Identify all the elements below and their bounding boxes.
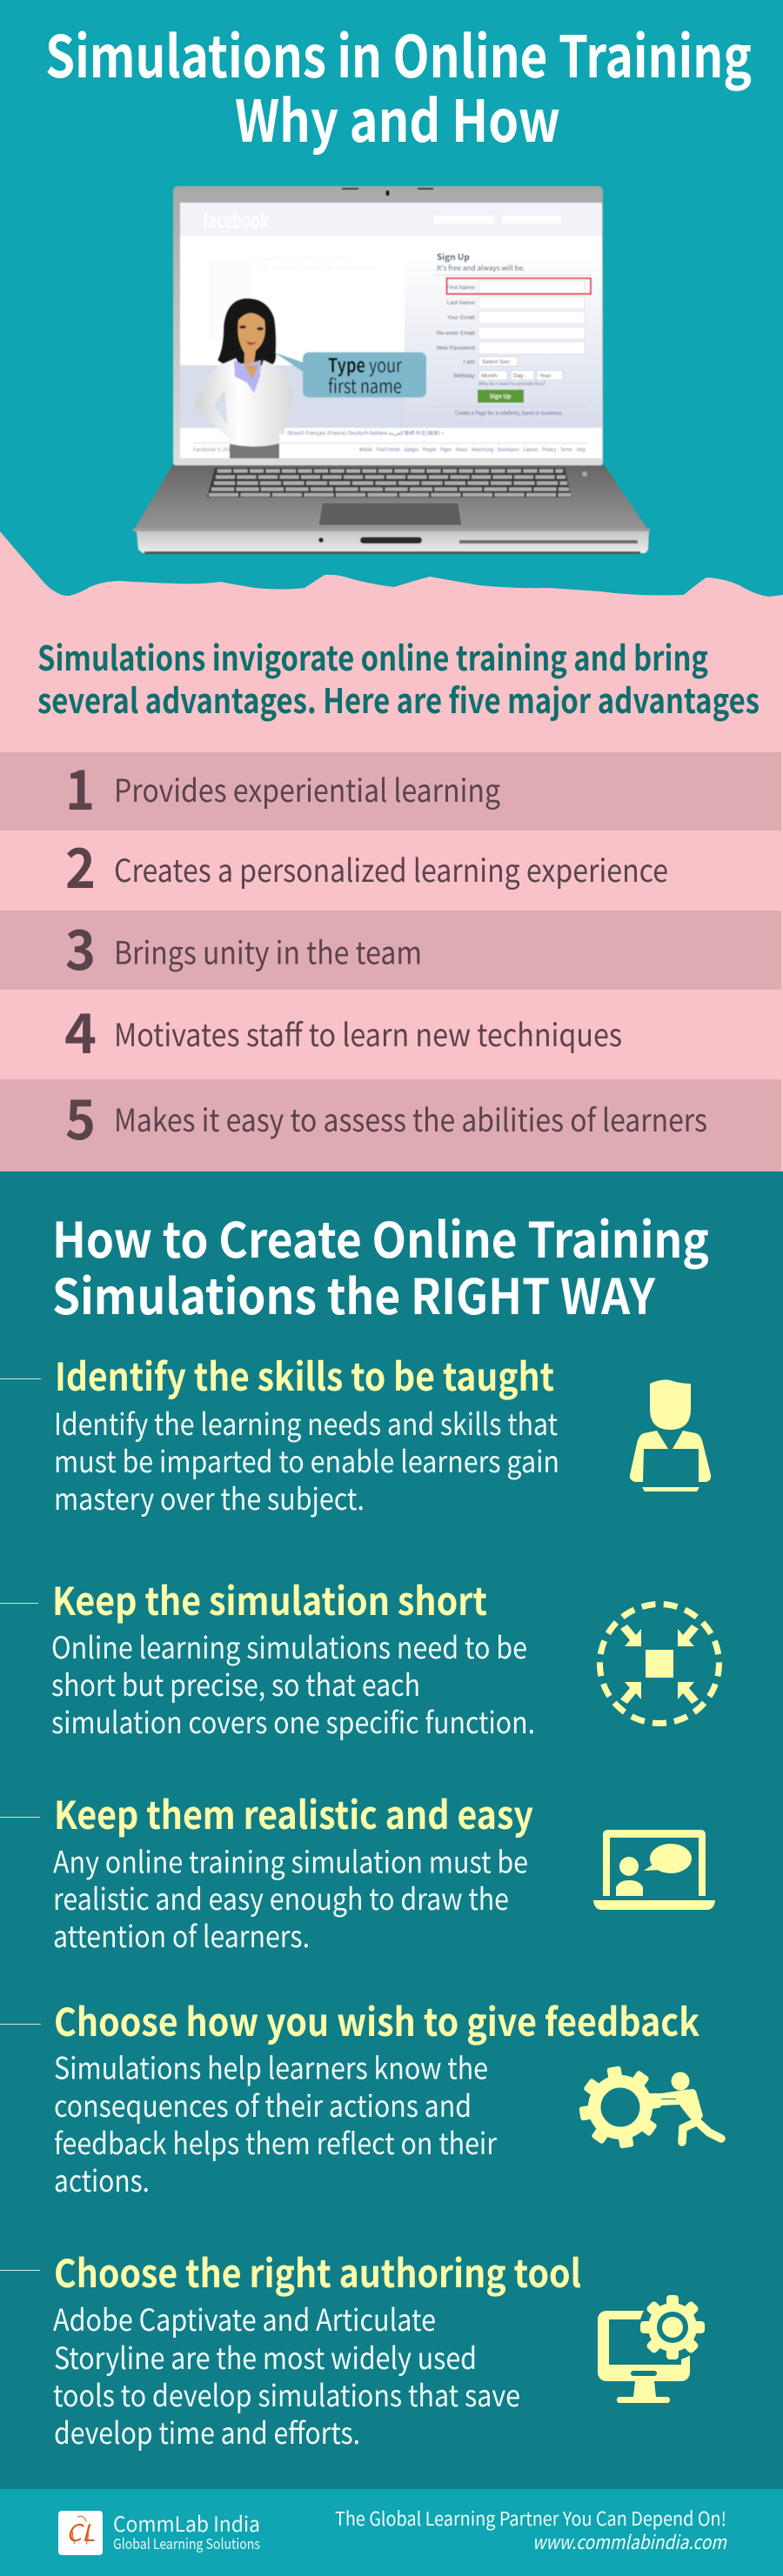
screen: sign-up page: Last Name: [447, 300, 476, 306]
screen: sign-up page: Create a Page for a celebrity, band or business. [455, 409, 563, 417]
panel: advantage 4: Motivates staff to learn new techniques [114, 1011, 622, 1056]
panel: advantage 2: Creates a personalized learning experience [114, 846, 668, 891]
step 1: identify skills [0, 1346, 711, 1518]
screen: sign-up page: facebook [203, 204, 269, 234]
title: Why and How [235, 76, 560, 159]
highlight: first name field [447, 278, 591, 294]
step 2: keep short: short but precise, so that each [51, 1661, 420, 1705]
step 5: authoring tool: develop time and efforts. [54, 2409, 360, 2453]
step 2: keep short: Online learning simulations need to be [51, 1624, 527, 1667]
step 5: authoring tool: Storyline are the most widely used [54, 2334, 477, 2378]
screen: sign-up page: First Name: [446, 285, 476, 290]
panel: advantage 5: Makes it easy to assess the abilities of learners [114, 1096, 707, 1141]
step 5: authoring tool: Choose the right authoring tool [54, 2243, 581, 2299]
screen: sign-up page: Heading out? Stay connected [258, 254, 352, 264]
screen: sign-up page: Re-enter Email: [437, 330, 476, 337]
step 3: realistic and easy [0, 1785, 715, 1956]
step 2: keep short: simulation covers one specific function. [51, 1698, 535, 1742]
screen: sign-up page: Sign Up [490, 391, 511, 400]
screen: sign-up page: Day: [513, 373, 525, 379]
step 3: realistic and easy: attention of learners. [53, 1912, 310, 1956]
panel: advantage 3 [0, 907, 781, 990]
screen: sign-up page: Month: [481, 373, 499, 379]
panel: advantage 3: 3 [65, 907, 96, 986]
step 4: feedback: Simulations help learners know the [54, 2044, 488, 2087]
screen: sign-up page: I am: [464, 359, 476, 365]
step 5: authoring tool: Adobe Captivate and Articulate [53, 2296, 436, 2339]
panel: how-to background [0, 1171, 783, 2489]
screen: sign-up page: Year: [539, 373, 552, 379]
tagline and website: The Global Learning Partner You Can Depend On! [335, 2504, 726, 2532]
panel: advantage 2 [0, 825, 781, 911]
step 2: keep short [0, 1571, 726, 1742]
footer [0, 2489, 783, 2576]
screen: sign-up page: Why do I need to provide this? [478, 380, 545, 387]
how-to heading: How to Create Online Training [52, 1202, 709, 1272]
laptop base [133, 465, 650, 554]
logo: CommLab India: CL [66, 2514, 95, 2548]
screen: sign-up page: (Brasil) Français (France) Deutsch Italiano العربية हिन्दी 中文(简体) » [287, 429, 444, 437]
step 1: identify skills: mastery over the subject. [54, 1475, 365, 1518]
panel: hero background [0, 0, 783, 609]
title [45, 11, 752, 159]
screen: sign-up page: Facebook © 2013 [193, 445, 233, 453]
step 3: realistic and easy: Any online training simulation must be [53, 1839, 528, 1882]
tagline and website: www.commlabindia.com [532, 2527, 727, 2555]
callout: type your first name: Type your [328, 350, 402, 378]
panel: advantage 4 [0, 990, 781, 1079]
icon: person with laptop [630, 1379, 711, 1492]
step 1: identify skills: Identify the skills to be taught [55, 1346, 554, 1402]
tagline and website [335, 2504, 727, 2555]
screen: sign-up page: Your Email: [447, 315, 476, 321]
panel: advantage 5 [0, 1077, 781, 1171]
panel: advantage 2: 2 [65, 825, 96, 904]
icon: arrows converging on a square [593, 1598, 726, 1730]
screen: sign-up page: Select Sex: [482, 359, 511, 365]
icon: laptop with speaker and speech bubble [593, 1830, 715, 1910]
laptop lid [173, 186, 603, 466]
step 3: realistic and easy: Keep them realistic and easy [54, 1785, 533, 1840]
step 1: identify skills: Identify the learning needs and skills that [54, 1400, 558, 1444]
step 4: feedback: feedback helps them reflect on their [54, 2119, 498, 2163]
step 4: feedback: Choose how you wish to give feedback [54, 1992, 699, 2047]
panel: advantage 1 [0, 747, 781, 831]
panel: advantage 1: 1 [65, 747, 95, 826]
screen: sign-up page: Birthday: [453, 373, 476, 379]
advantages heading [37, 632, 760, 724]
screen: sign-up page: It's free and always will be. [437, 263, 525, 273]
screen: sign-up page: Visit facebook.com on your mobile phone. [258, 264, 378, 272]
character: instructor [194, 298, 294, 458]
screen: sign-up page: Mobile · Find Friends · Badges · People · Pages · About · Advertising · Developers · Careers · Privacy · Terms · Help [359, 445, 586, 453]
panel: advantage 3: Brings unity in the team [114, 929, 422, 974]
logo: CommLab India: Global Learning Solutions [113, 2533, 260, 2553]
step 5: authoring tool: tools to develop simulations that save [53, 2372, 520, 2415]
icon: person pushing a gear [573, 2060, 721, 2154]
logo: CommLab India [58, 2507, 260, 2555]
screen: sign-up page: Sign Up [437, 250, 470, 263]
panel: advantage 1: Provides experiential learning [114, 766, 500, 811]
how-to heading: Simulations the RIGHT WAY [52, 1258, 655, 1329]
callout: type your first name: first name [328, 371, 402, 399]
illustration: laptop with simulation [133, 186, 650, 554]
how-to heading [52, 1202, 709, 1329]
step 4: feedback: actions. [54, 2157, 150, 2200]
screen: sign-up page [180, 203, 602, 458]
callout: type your first name [274, 350, 426, 399]
step 4: feedback: consequences of their actions and [54, 2082, 472, 2126]
step 3: realistic and easy: realistic and easy enough to draw the [53, 1875, 509, 1919]
panel: advantage 5: 5 [65, 1077, 96, 1156]
logo: CommLab India: CommLab India [113, 2507, 260, 2538]
step 1: identify skills: must be imparted to enable learners gain [54, 1438, 559, 1481]
step 2: keep short: Keep the simulation short [52, 1571, 487, 1626]
step 4: feedback [0, 1992, 721, 2200]
panel: advantage 4: 4 [64, 991, 97, 1070]
icon: monitor with gear [598, 2294, 706, 2403]
screen: sign-up page: New Password: [437, 345, 476, 351]
panel: pink wave and advantages background [0, 531, 783, 1171]
step 5: authoring tool [0, 2243, 706, 2453]
